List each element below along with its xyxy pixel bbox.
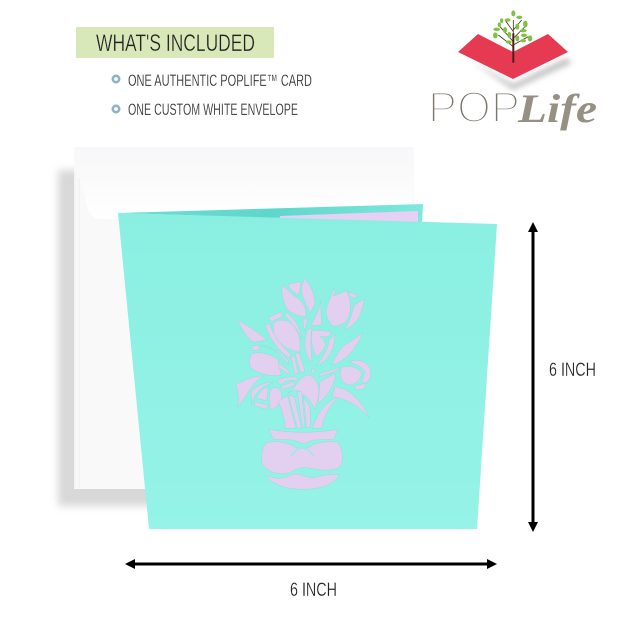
logo: PopLife xyxy=(428,10,597,132)
card front panel xyxy=(118,213,497,529)
arrow: height dimension xyxy=(528,222,538,532)
flower vase cutout xyxy=(236,279,371,489)
label: width: 6 INCH xyxy=(290,579,337,601)
list: included items xyxy=(113,72,312,119)
envelope shadow xyxy=(58,170,358,506)
list item: card: ONE AUTHENTIC POPLIFE™ CARD xyxy=(128,72,312,90)
logo shadow xyxy=(470,58,572,90)
logo tree xyxy=(493,10,532,63)
label: height: 6 INCH xyxy=(549,359,596,381)
heading: what's included xyxy=(76,27,274,58)
card back panel xyxy=(118,204,423,223)
logo wordmark POP: POP xyxy=(428,83,520,132)
envelope xyxy=(58,147,414,506)
card xyxy=(118,204,497,529)
envelope flap xyxy=(76,147,413,219)
logo wordmark Life: Life xyxy=(517,86,597,131)
heading: what's included: WHAT'S INCLUDED xyxy=(96,30,255,57)
card inner lilac strip xyxy=(280,211,418,222)
envelope body xyxy=(74,147,414,489)
list item: envelope: ONE CUSTOM WHITE ENVELOPE xyxy=(128,101,298,119)
logo book shape xyxy=(458,34,568,79)
list item: card xyxy=(113,72,312,90)
list item: envelope xyxy=(113,101,298,119)
arrow: width dimension xyxy=(125,559,497,569)
